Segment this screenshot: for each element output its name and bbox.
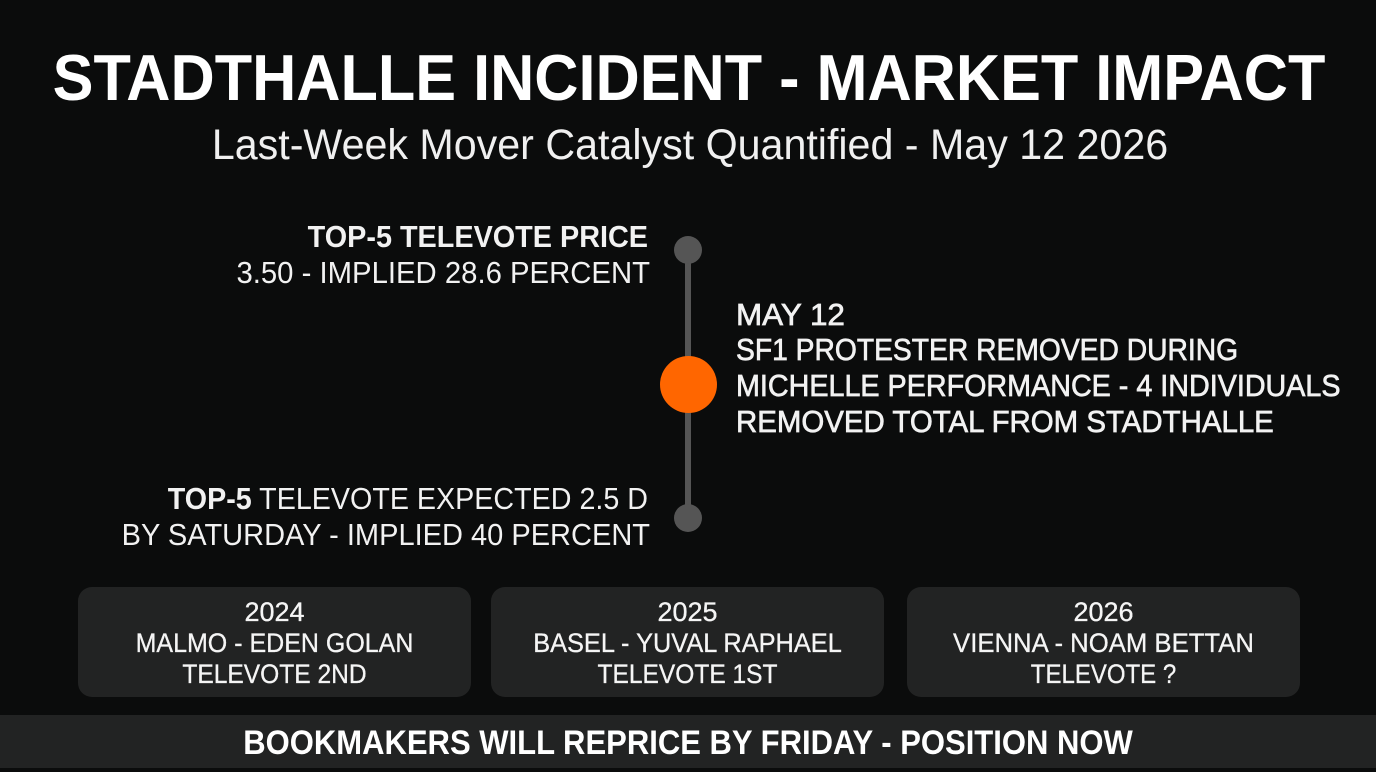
may 12 event text: MICHELLE PERFORMANCE - 4 INDIVIDUALS [736,368,1341,403]
may 12 event text: REMOVED TOTAL FROM STADTHALLE [736,404,1274,439]
card: 2026 [907,587,1300,697]
expected price label [122,481,650,552]
top-5 televote price label: TOP-5 TELEVOTE PRICE [308,219,648,254]
card: 2026: VIENNA - NOAM BETTAN [953,628,1254,658]
title: STADTHALLE INCIDENT - MARKET IMPACT [53,41,1325,114]
card: 2025 [491,587,884,697]
may 12 event text: MAY 12 [736,297,845,332]
timeline line [685,249,691,519]
top-5 televote price label: 3.50 - IMPLIED 28.6 PERCENT [236,255,650,290]
bottom banner [0,715,1376,768]
bottom marker [674,504,702,532]
card: 2024: 2024 [244,597,305,627]
card: 2025: BASEL - YUVAL RAPHAEL [533,628,842,658]
expected price label: BY SATURDAY - IMPLIED 40 PERCENT [122,517,650,552]
subtitle: Last-Week Mover Catalyst Quantified - May 12 2026 [212,121,1168,169]
card: 2024: MALMO - EDEN GOLAN [136,628,413,658]
timeline [660,236,717,532]
card: 2024 [78,587,471,697]
may 12 event text [736,297,1341,439]
card: 2026: TELEVOTE ? [1031,659,1176,689]
may 12 event text: SF1 PROTESTER REMOVED DURING [736,332,1238,367]
top-5 televote price label [236,219,650,290]
card: 2024: TELEVOTE 2ND [182,659,367,689]
top marker [674,236,702,264]
card: 2025: TELEVOTE 1ST [597,659,778,689]
card: 2025: 2025 [657,597,718,627]
center marker [660,356,717,413]
expected price label: TOP-5 TELEVOTE EXPECTED 2.5 D [168,481,648,516]
bottom banner: BOOKMAKERS WILL REPRICE BY FRIDAY - POSITION NOW [243,724,1133,762]
card: 2026: 2026 [1073,597,1134,627]
